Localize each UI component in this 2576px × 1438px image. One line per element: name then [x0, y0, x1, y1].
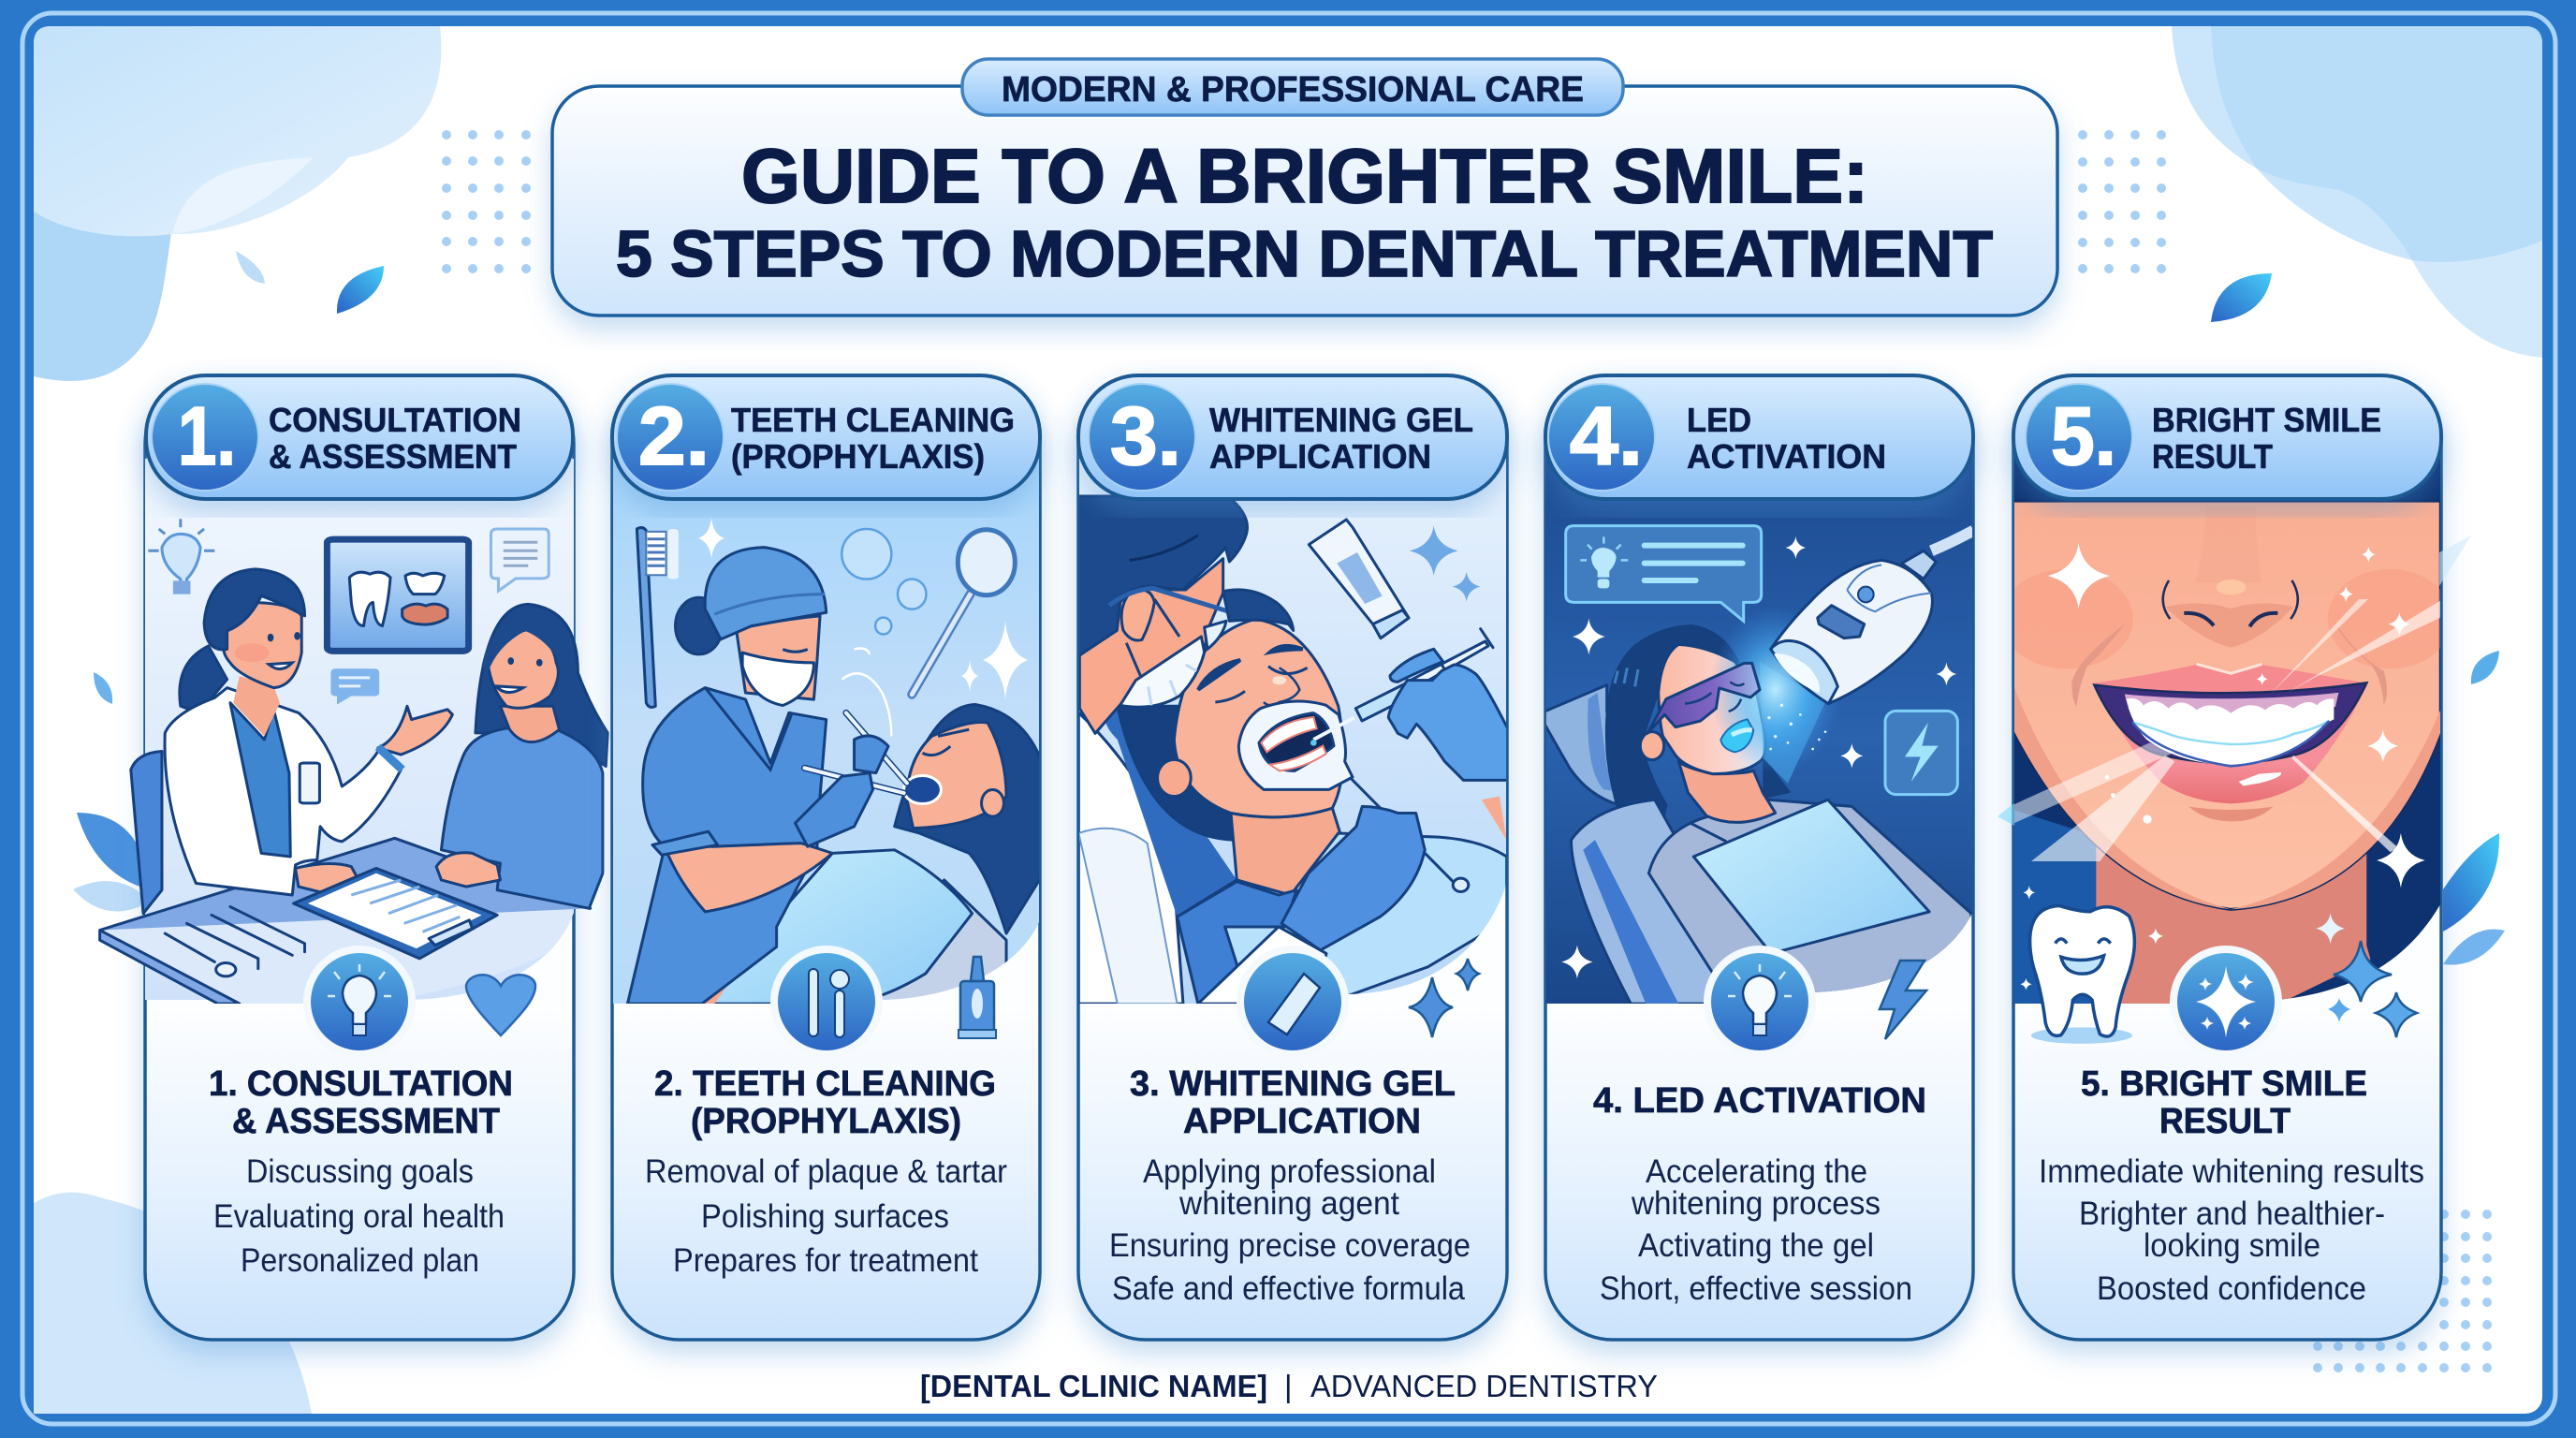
instruments [165, 933, 214, 961]
patient hair [895, 704, 1044, 933]
patient neck and head [1231, 808, 1344, 897]
heading: 5. BRIGHT SMILE [2081, 1064, 2367, 1104]
nose base [2165, 604, 2293, 648]
bullet list [213, 1153, 505, 1279]
bullet list: Discussing goals [246, 1153, 474, 1190]
toothbrush [637, 528, 655, 707]
title line 2: 5 STEPS TO MODERN DENTAL TREATMENT [616, 217, 1993, 290]
heading [654, 1064, 996, 1141]
patient face, lamp and panels [1566, 526, 1973, 822]
face [1659, 644, 1765, 774]
nose [1264, 668, 1299, 705]
bubbles [842, 529, 891, 580]
lightbulb [162, 534, 200, 589]
title panel [552, 59, 2057, 315]
spray [842, 649, 891, 736]
card 1: consultation [100, 375, 607, 1340]
table [103, 919, 571, 1004]
nose bridge [2195, 506, 2261, 582]
dots top right [2078, 130, 2166, 273]
heading [2081, 1064, 2367, 1141]
bullet list: whitening process [1631, 1185, 1881, 1222]
footer [920, 1369, 1658, 1403]
bullet list: Applying professional [1143, 1153, 1436, 1190]
shirt [1178, 833, 1507, 1004]
header pill: WHITENING GEL [1209, 401, 1473, 439]
sparkles [2020, 543, 2425, 990]
illustration: gel application [1076, 459, 1514, 1011]
bullet list: Short, effective session [1600, 1270, 1912, 1307]
neck [1678, 761, 1776, 822]
card 5: bright smile [1998, 375, 2471, 1340]
mouth detail [2012, 599, 2443, 861]
lower glove [1281, 806, 1425, 950]
coat sleeve [1198, 927, 1326, 1004]
bullet list: Safe and effective formula [1112, 1270, 1465, 1307]
header pill: TEETH CLEANING [731, 401, 1015, 439]
chat bubble [330, 668, 379, 704]
bullet list: Immediate whitening results [2039, 1153, 2424, 1190]
speech bubble [491, 529, 549, 591]
header pill: 4. [1570, 389, 1643, 482]
heading: 1. CONSULTATION [209, 1064, 513, 1104]
dentist ear [1121, 589, 1154, 640]
header pill: & ASSESSMENT [269, 437, 517, 476]
header pill: (PROPHYLAXIS) [731, 437, 985, 476]
bullet list: Prepares for treatment [673, 1242, 978, 1279]
header pill: 2. [638, 389, 710, 482]
lamp cable [1931, 531, 1973, 550]
header pill [146, 375, 573, 499]
icon: toothpaste tube [959, 957, 996, 1038]
tools in hand [846, 712, 907, 783]
heading: & ASSESSMENT [232, 1102, 500, 1141]
brows and eyes [1198, 646, 1303, 690]
header pill: ACTIVATION [1687, 437, 1886, 476]
bullet list [645, 1153, 1007, 1279]
dentist hair [1076, 496, 1247, 655]
glow corner [2012, 810, 2098, 1005]
header pill [2013, 375, 2441, 499]
heading: RESULT [2159, 1102, 2291, 1141]
heading: 3. WHITENING GEL [1130, 1064, 1456, 1104]
speech panel [1566, 526, 1762, 621]
bullet list: Accelerating the [1646, 1153, 1867, 1190]
beams [2287, 599, 2443, 693]
particles [1767, 704, 1826, 750]
sparkles [698, 518, 1028, 699]
footer: [DENTAL CLINIC NAME] [920, 1369, 1267, 1403]
tip of syringe [1310, 740, 1317, 746]
header pill: 3. [1110, 389, 1181, 482]
eyebrow badge: MODERN & PROFESSIONAL CARE [1002, 70, 1584, 110]
detail: dentist head, patient face, syringe, tube [1076, 496, 1514, 789]
sparkles [1573, 536, 1956, 769]
hygienist [676, 597, 723, 654]
bolt box [1885, 711, 1957, 795]
bullet list: looking smile [2144, 1227, 2320, 1264]
lamp body [1771, 560, 1932, 704]
teeth base [2125, 693, 2338, 765]
tool [1332, 759, 1455, 884]
glasses [1109, 588, 1229, 611]
chair and hair [1544, 625, 1791, 873]
upper glove [1388, 665, 1514, 780]
heading [209, 1064, 513, 1141]
bullet list: whitening agent [1178, 1185, 1399, 1222]
footer: ADVANCED DENTISTRY [1310, 1369, 1658, 1403]
neck [2096, 837, 2370, 1005]
dentist coat [1078, 712, 1183, 1004]
icon: sparkle stars [1409, 959, 1479, 1037]
illustration: LED lamp on patient [1544, 459, 1973, 1011]
mask [1120, 637, 1205, 707]
icon: sparkle badge [2170, 946, 2282, 1058]
dentist [180, 646, 227, 712]
icon: lightbulb badge [303, 946, 416, 1058]
header pill: CONSULTATION [269, 401, 521, 439]
header pill: LED [1687, 401, 1751, 439]
patient [476, 604, 607, 767]
sparkles [1410, 526, 1458, 576]
heading [1130, 1064, 1456, 1141]
patient top hair [1223, 590, 1294, 630]
bullet list: Personalized plan [241, 1242, 479, 1279]
icon: LED bulb badge [1704, 946, 1816, 1058]
light rays over card edge [1998, 536, 2471, 826]
title line 1: GUIDE TO A BRIGHTER SMILE: [741, 134, 1868, 219]
bullet list: Evaluating oral health [213, 1198, 505, 1235]
icon: gel tube badge [1237, 946, 1349, 1058]
lip highlight [2239, 772, 2281, 785]
illustration: dentist and patient at a table [100, 459, 607, 1004]
icon: tooth mascot [2030, 905, 2134, 1044]
smile lines [2071, 616, 2387, 707]
card 4: LED activation [1544, 375, 1973, 1340]
header pill: APPLICATION [1209, 437, 1431, 476]
retractor and mouth [1238, 701, 1353, 789]
header pill: 1. [178, 389, 236, 482]
bullet list: Polishing surfaces [701, 1198, 949, 1235]
goggles [1647, 663, 1760, 733]
header pill [1545, 375, 1973, 499]
patient hair [1118, 706, 1237, 840]
illustration: smiling face [2000, 459, 2452, 1011]
dentist skin [1079, 559, 1223, 733]
bullet list: Brighter and healthier- [2079, 1196, 2385, 1232]
heading: 4. LED ACTIVATION [1593, 1081, 1926, 1121]
icon: dental tools badge [770, 946, 883, 1058]
footer: | [1284, 1369, 1293, 1403]
tooth monitor [327, 539, 469, 651]
header pill [612, 375, 1040, 499]
header pill: BRIGHT SMILE [2152, 401, 2381, 439]
bib and body [882, 878, 1008, 1000]
dots bottom right [2313, 1210, 2492, 1372]
heading: (PROPHYLAXIS) [691, 1102, 961, 1141]
dots top left [442, 130, 531, 273]
chair lower and body [1561, 800, 1971, 1004]
card 3: whitening gel [1076, 375, 1514, 1340]
gel tube [1309, 520, 1409, 638]
card 2: teeth cleaning [612, 375, 1044, 1340]
icon: blue stars [2328, 941, 2417, 1037]
face [2012, 501, 2440, 909]
bullet list: Boosted confidence [2097, 1270, 2366, 1307]
illustration: hygienist cleaning teeth [613, 459, 1044, 1011]
syringe [1313, 718, 1354, 740]
icon: heart [466, 975, 535, 1035]
header pill: RESULT [2152, 437, 2273, 476]
bullet list: Activating the gel [1638, 1227, 1874, 1264]
chin shadow [2188, 807, 2273, 821]
bullet list: Ensuring precise coverage [1109, 1227, 1471, 1264]
header pill: 5. [2051, 389, 2116, 482]
mouth [1720, 719, 1753, 752]
icon: lightning bolt [1880, 961, 1926, 1039]
mouth cavity [2094, 682, 2366, 763]
clipboard [294, 868, 497, 959]
mirror [912, 594, 971, 695]
heading: 2. TEETH CLEANING [654, 1064, 996, 1104]
lips [2092, 665, 2368, 803]
eyebrow badge [962, 59, 1623, 115]
heading: APPLICATION [1183, 1102, 1421, 1141]
decorative leaves [73, 251, 2505, 965]
bullet list [2039, 1153, 2424, 1307]
upper teeth [2127, 698, 2334, 746]
light cone [1760, 662, 1825, 784]
bullet list [1600, 1153, 1912, 1307]
bullet list [1109, 1153, 1471, 1307]
header pill [1078, 375, 1507, 499]
bullet list: Removal of plaque & tartar [645, 1153, 1007, 1190]
